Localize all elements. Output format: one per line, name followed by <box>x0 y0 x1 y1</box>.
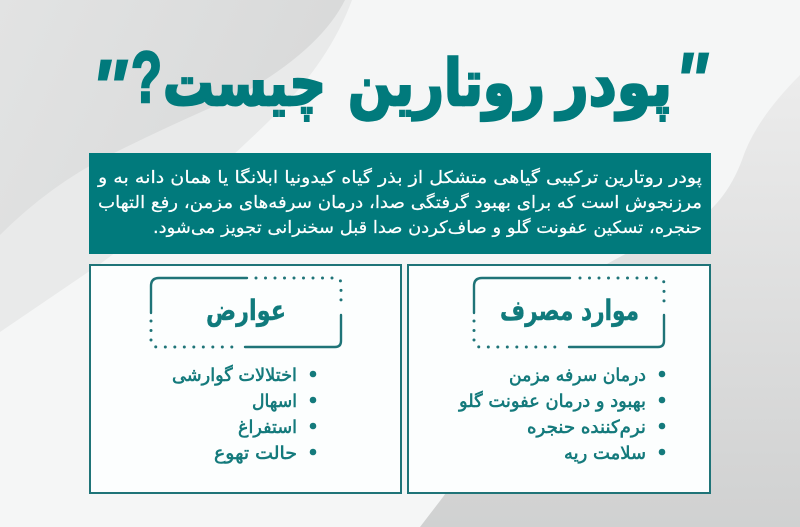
title: ? <box>131 38 162 118</box>
heading frame: uses <box>474 278 664 347</box>
list: side effects: حالت تهوع <box>214 443 297 464</box>
panel: side effects <box>90 265 401 493</box>
description text: حنجره، تسکین عفونت گلو و صاف‌کردن صدا قبل سخنرانی تجویز می‌شود. <box>153 217 702 238</box>
list: side effects <box>172 364 316 464</box>
title: چیست <box>163 47 326 121</box>
panel: description <box>89 153 711 254</box>
list: side effects: اسهال <box>252 391 297 412</box>
title: پودر <box>554 47 672 121</box>
list: uses: درمان سرفه مزمن <box>509 365 646 386</box>
list: side effects: اختلالات گوارشی <box>172 364 297 386</box>
list: uses: بهبود و درمان عفونت گلو <box>458 390 646 412</box>
list: side effects: استفراغ <box>238 417 297 438</box>
list: uses: نرم‌کننده حنجره <box>527 417 646 438</box>
list: uses: سلامت ریه <box>564 443 646 464</box>
heading: uses: موارد مصرف <box>500 294 639 327</box>
title: " <box>90 43 128 132</box>
heading frame: side effects <box>151 278 341 347</box>
description text <box>97 167 702 238</box>
title: " <box>674 36 709 125</box>
list: uses <box>458 365 665 464</box>
title <box>90 36 709 132</box>
panel: uses <box>408 265 710 493</box>
description text: پودر روتارین ترکیبی گیاهی متشکل از بذر گیاه کیدونیا ابلانگا یا همان دانه به و <box>97 167 702 188</box>
heading: side effects: عوارض <box>206 294 286 327</box>
description text: مرزنجوش است که برای بهبود گرفتگی صدا، درمان سرفه‌های مزمن، رفع التهاب <box>98 192 702 213</box>
title: روتارین <box>348 47 545 121</box>
